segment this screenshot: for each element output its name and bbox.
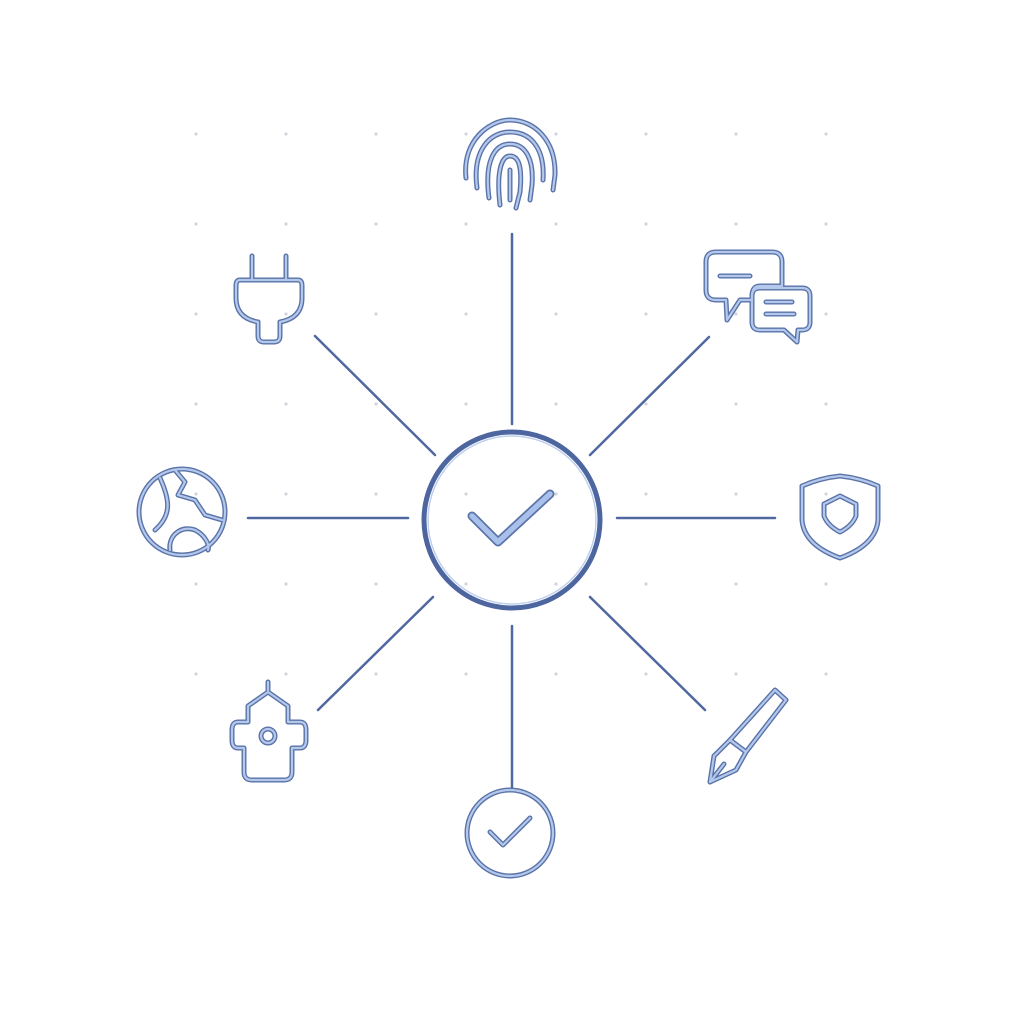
icon: hydrant — [232, 682, 306, 780]
center check circle — [424, 432, 600, 608]
icon: pen — [710, 690, 786, 782]
icon: chat bubbles — [706, 252, 810, 342]
background dot grid — [180, 120, 880, 720]
icon: fingerprint — [466, 120, 555, 208]
connector lines — [248, 234, 775, 788]
icon: globe — [139, 469, 225, 555]
icon: shield — [802, 476, 878, 558]
icon: plug — [236, 256, 302, 342]
icon: check circle — [467, 790, 553, 876]
